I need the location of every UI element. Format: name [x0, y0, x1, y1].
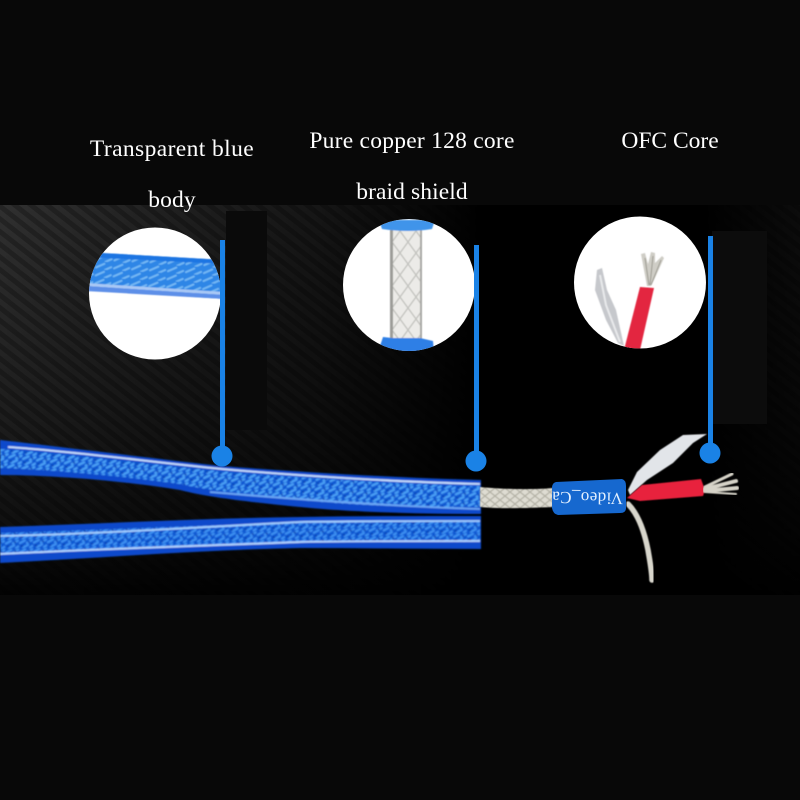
detail circle: blue jacket: [85, 228, 224, 360]
strand fan: [705, 474, 732, 487]
cable: blue inner sleeve with print: Video_Ca: [552, 488, 623, 508]
cable: copper strands: [705, 474, 737, 494]
heading: transparent blue body: [90, 136, 254, 213]
dark panel behind first leader line: [226, 211, 267, 430]
cable: blue inner sleeve with print: [552, 479, 626, 515]
detail circle: braid shield: [343, 219, 475, 352]
dark panel behind third leader line: [712, 231, 767, 424]
cable: upper blue jacket: [0, 440, 481, 514]
leader line and dot: jacket: [212, 240, 232, 466]
cable: drain wire: [628, 504, 652, 580]
heading: pure copper braid shield: braid shield: [356, 179, 468, 205]
striped dark band background: [0, 205, 800, 595]
heading: pure copper braid shield: [309, 128, 515, 205]
cable: red core: [627, 479, 705, 501]
heading: OFC core: OFC Core: [621, 128, 719, 154]
infographic canvas: [0, 132, 739, 584]
cable: exposed silver braid: [480, 487, 553, 508]
heading: transparent blue body: Transparent blue: [90, 136, 254, 162]
leader line and dot: braid: [466, 245, 486, 472]
heading: pure copper braid shield: Pure copper 128 core: [309, 128, 515, 154]
cable: foil shield strip: [628, 434, 707, 495]
heading: transparent blue body: body: [148, 187, 196, 213]
leader line and dot: core: [700, 236, 720, 464]
cable: lower blue jacket: [0, 516, 481, 563]
detail circle: red core: [574, 216, 706, 350]
